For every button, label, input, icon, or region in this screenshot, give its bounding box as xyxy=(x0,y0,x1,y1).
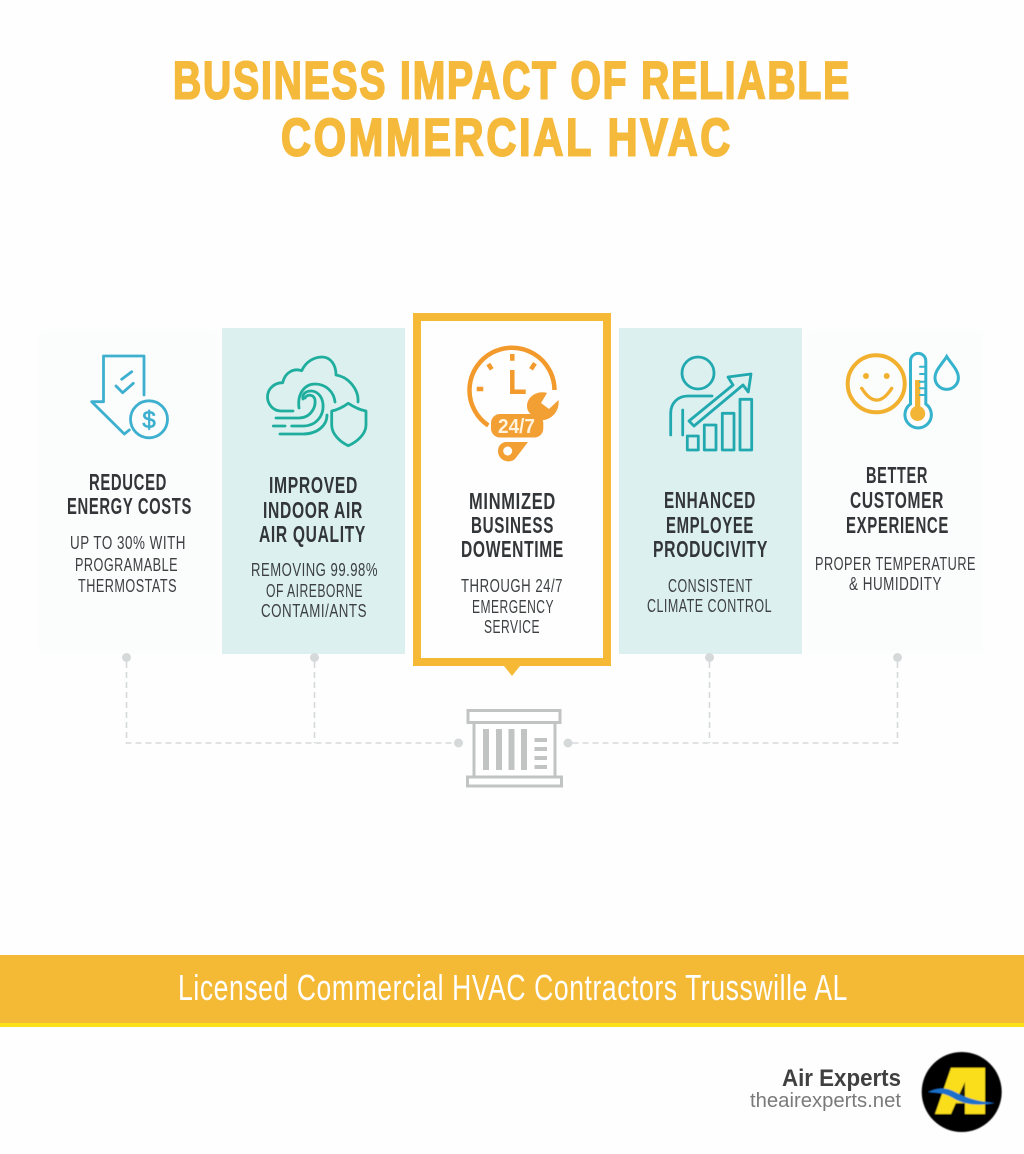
description: CONSISTENT xyxy=(668,576,753,596)
heading xyxy=(653,487,768,562)
description: THERMOSTATS xyxy=(78,576,177,596)
panel: better customer experience xyxy=(808,330,983,652)
heading: CUSTOMER xyxy=(850,487,944,513)
heading: DOWENTIME xyxy=(461,536,564,562)
heading: REDUCED xyxy=(89,469,167,495)
heading xyxy=(259,472,366,547)
brand name and url: Air Experts xyxy=(782,1065,901,1092)
description xyxy=(461,576,563,637)
description: CLIMATE CONTROL xyxy=(647,596,772,616)
description xyxy=(815,554,976,594)
description: THROUGH 24/7 xyxy=(461,576,563,596)
connector lines xyxy=(122,653,902,748)
heading: ENHANCED xyxy=(664,487,756,513)
brand name and url: theairexperts.net xyxy=(750,1090,901,1112)
brand name and url xyxy=(750,1065,901,1112)
icon: down arrow with dollar coin xyxy=(92,356,168,438)
heading: EXPERIENCE xyxy=(846,512,949,538)
heading: ENERGY COSTS xyxy=(67,493,192,519)
description xyxy=(251,560,378,621)
description: & HUMIDDITY xyxy=(849,574,942,594)
description: CONTAMI/ANTS xyxy=(261,601,367,621)
icon: 24/7 clock with wrench xyxy=(470,348,559,461)
description: EMERGENCY xyxy=(472,597,554,617)
panel: minimized business downtime (highlighted) xyxy=(417,317,607,676)
panel: enhanced employee productivity xyxy=(619,328,802,654)
heading: MINMIZED xyxy=(469,488,556,514)
icon: person with rising bar chart xyxy=(671,357,752,450)
description: UP TO 30% WITH xyxy=(70,533,186,553)
description xyxy=(70,533,186,596)
heading: IMPROVED xyxy=(269,472,358,498)
heading xyxy=(846,462,949,538)
heading: INDOOR AIR xyxy=(263,497,363,523)
description: REMOVING 99.98% xyxy=(251,560,378,580)
heading: PRODUCIVITY xyxy=(653,536,768,562)
panel: reduced energy costs xyxy=(40,330,216,652)
logo xyxy=(922,1052,1002,1132)
icon: down arrow with dollar coin: $ xyxy=(142,407,156,434)
heading: BUSINESS xyxy=(471,512,554,538)
heading: AIR QUALITY xyxy=(259,521,366,547)
title xyxy=(173,52,851,168)
heading xyxy=(461,488,564,562)
panel: improved indoor air quality xyxy=(222,328,405,654)
heading xyxy=(67,469,192,519)
description: SERVICE xyxy=(484,617,540,637)
description: PROGRAMABLE xyxy=(75,555,178,575)
title: COMMERCIAL HVAC xyxy=(281,108,733,168)
description xyxy=(647,576,772,616)
icon: hvac unit xyxy=(468,710,562,786)
heading: EMPLOYEE xyxy=(666,512,754,538)
banner xyxy=(0,955,1024,1027)
icon: 24/7 clock with wrench: 24/7 xyxy=(498,416,535,438)
description: OF AIREBORNE xyxy=(266,581,363,601)
icon: cloud, air swirl and shield xyxy=(268,357,366,446)
icon: smiley, thermometer and water drop xyxy=(848,353,958,428)
heading: BETTER xyxy=(866,462,928,488)
